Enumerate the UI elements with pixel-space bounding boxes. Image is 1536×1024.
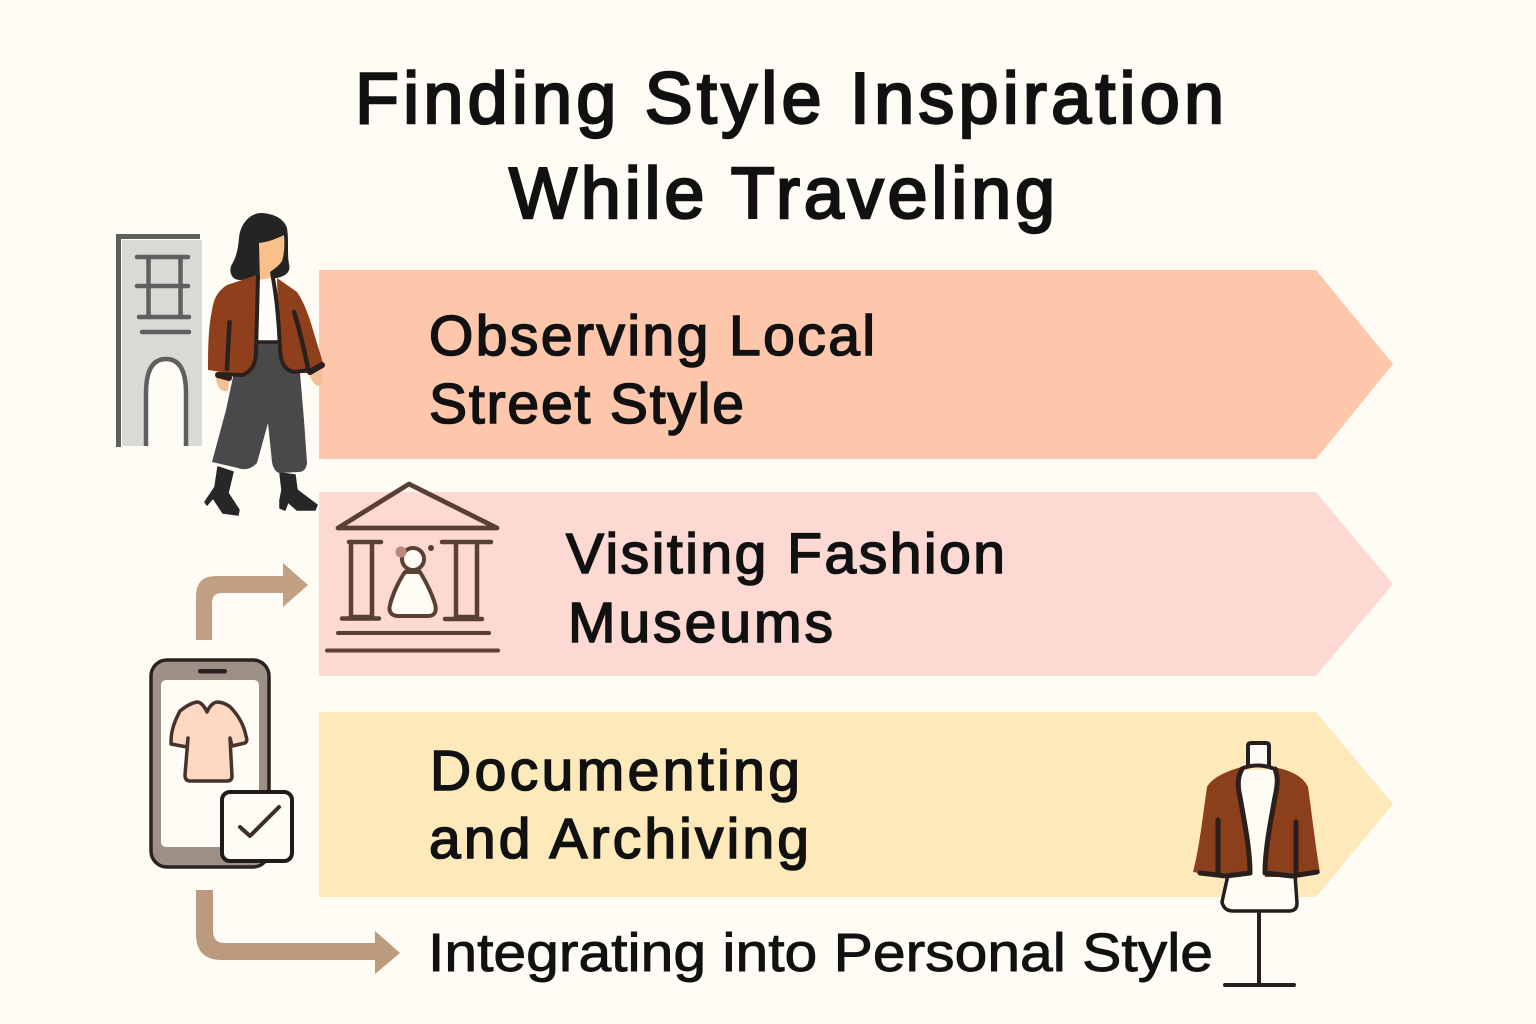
- icon: phone with saved shirt: [151, 660, 292, 867]
- title: Finding Style Inspiration: [355, 59, 1224, 139]
- dress: [389, 572, 436, 616]
- heading: observing local street style: [429, 304, 875, 436]
- heading: observing local street style: Observing Local: [429, 304, 875, 368]
- jacket: [1193, 767, 1250, 877]
- jacket: [208, 275, 257, 376]
- heading: visiting fashion museums: [566, 522, 1005, 655]
- heading: observing local street style: Street Style: [429, 372, 744, 436]
- checkbox: [222, 792, 292, 861]
- title: While Traveling: [509, 154, 1055, 234]
- panel: visiting fashion museums: [319, 492, 1393, 676]
- arrow: phone to museum: [196, 563, 308, 640]
- hair: [230, 213, 289, 280]
- icon: woman in rust jacket: [205, 213, 323, 515]
- boots: [205, 467, 239, 515]
- arrow: phone to personal style: [196, 890, 400, 974]
- panel: observing local street style: [319, 270, 1393, 459]
- panel: documenting and archiving: [319, 712, 1393, 897]
- text: integrating into personal style: Integrating into Personal Style: [428, 923, 1213, 983]
- heading: documenting and archiving: [429, 739, 809, 871]
- title: [355, 59, 1224, 234]
- shirt: [171, 702, 247, 781]
- face: [259, 235, 284, 284]
- heading: documenting and archiving: Documenting: [430, 739, 800, 803]
- icon: building: [118, 236, 202, 447]
- heading: documenting and archiving: and Archiving: [429, 807, 809, 871]
- icon: jacket on mannequin: [1193, 743, 1320, 985]
- heading: visiting fashion museums: Visiting Fashion: [566, 522, 1005, 586]
- heading: visiting fashion museums: Museums: [568, 591, 833, 655]
- shirt: [257, 278, 279, 341]
- trousers: [212, 342, 307, 473]
- hands: [216, 376, 230, 391]
- icon: museum with dress: [327, 484, 498, 650]
